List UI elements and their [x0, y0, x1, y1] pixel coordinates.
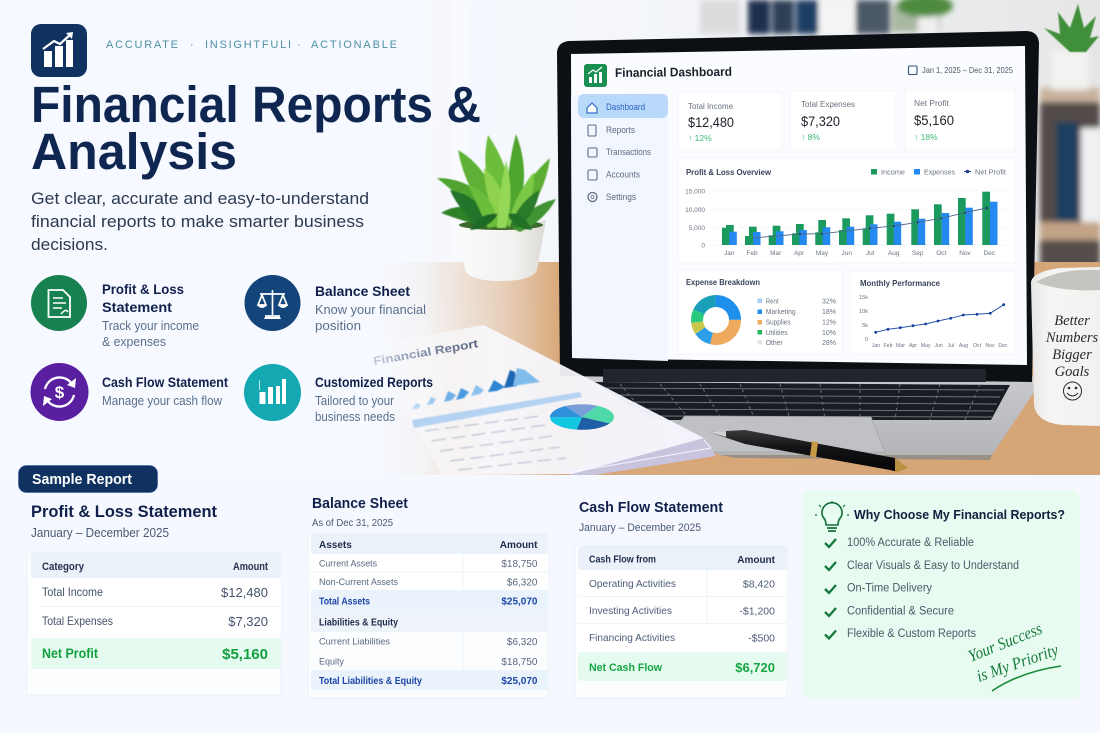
plant: [437, 134, 556, 281]
net profit line: [752, 207, 988, 238]
mug slogan: Better: [1054, 313, 1090, 329]
feature: profit and loss statement: Track your income: [102, 319, 199, 333]
month labels: Dec: [984, 250, 996, 257]
panel: profit and loss table: Total Expenses: [42, 614, 113, 628]
icon: bars: [244, 364, 301, 421]
panel: profit and loss table: [27, 503, 281, 695]
KPI card: total income: $12,480: [688, 115, 734, 130]
donut legend: Utilities: [766, 330, 788, 337]
laptop bezel: [557, 31, 1039, 382]
check list: Confidential & Secure: [847, 606, 954, 618]
dashboard screen: [571, 46, 1027, 365]
panel: monthly performance: Nov: [985, 343, 995, 349]
mug: [1031, 267, 1100, 426]
icon: scales: [244, 275, 300, 331]
liability rows: Current Liabilities: [319, 636, 390, 648]
chart legend: Expenses: [924, 168, 955, 176]
sidebar: Settings: [606, 192, 636, 202]
trackpad: [672, 416, 885, 452]
month labels: Mar: [770, 250, 782, 257]
feature: balance sheet: Balance Sheet: [315, 284, 411, 299]
background photo: wooden desk: [380, 262, 1100, 475]
tagline: ·: [190, 39, 194, 51]
panel: expense breakdown: Expense Breakdown: [686, 277, 760, 287]
feature: customized reports: business needs: [315, 410, 395, 424]
panel: balance sheet table: As of Dec 31, 2025: [312, 517, 393, 529]
feature: profit and loss statement: [31, 275, 199, 349]
panel: profit and loss table: Profit & Loss Statement: [31, 503, 217, 521]
line chart: [874, 303, 1005, 334]
month labels: May: [816, 250, 829, 257]
feature: balance sheet: position: [315, 319, 361, 333]
check list: Clear Visuals & Easy to Understand: [847, 560, 1019, 572]
net cash flow row: [578, 652, 787, 681]
panel: balance sheet table: $6,320: [507, 637, 538, 648]
table rows: Operating Activities: [589, 578, 676, 590]
panel: monthly performance: 0: [865, 337, 868, 343]
donut legend: Supplies: [766, 320, 791, 326]
tagline: ·: [297, 39, 301, 51]
chart legend: Net Profit: [975, 168, 1007, 176]
check list: On-Time Delivery: [847, 582, 932, 594]
sample report badge: [18, 466, 158, 492]
panel: monthly performance: Apr: [909, 343, 917, 349]
panel: balance sheet table: Non-Current Assets: [319, 577, 398, 588]
panel: monthly performance: Jul: [948, 343, 954, 349]
KPI card: total income: [678, 92, 782, 150]
asset rows: Current Assets: [319, 558, 377, 570]
dashboard header: Financial Dashboard: [615, 65, 732, 80]
main title: Financial Reports &: [31, 76, 481, 133]
feature: profit and loss statement: Statement: [102, 300, 173, 315]
tagline: [106, 39, 397, 51]
chart axis labels: [685, 188, 705, 250]
intro paragraph: financial reports to make smarter business: [31, 213, 364, 231]
feature: balance sheet: [244, 275, 426, 333]
month labels: Feb: [746, 250, 758, 257]
panel: profit and loss table: $5,160: [222, 646, 268, 663]
liabilities header: [311, 610, 548, 632]
month labels: Sep: [912, 250, 924, 257]
panel: balance sheet table: $18,750: [501, 559, 538, 570]
intro paragraph: Get clear, accurate and easy-to-understand: [31, 190, 369, 208]
pen: [709, 430, 908, 473]
panel: monthly performance: Jan: [872, 343, 880, 349]
donut legend: [758, 298, 836, 347]
net profit row: [31, 638, 281, 669]
sidebar: [571, 93, 668, 361]
month labels: [724, 250, 996, 257]
chart panel: profit and loss overview: [678, 158, 1015, 263]
panel: balance sheet table: Total Liabilities & Equity: [319, 676, 422, 687]
dashboard header: Jan 1, 2025 – Dec 31, 2025: [922, 65, 1013, 75]
KPI card: total expenses: $7,320: [801, 114, 840, 129]
panel: profit and loss table: $7,320: [228, 614, 268, 629]
panel: why choose my financial reports: Why Choose My Financial Reports?: [854, 507, 1065, 522]
panel: balance sheet table: Total Assets: [319, 596, 370, 608]
chart legend: [871, 168, 1007, 176]
laptop deck: [575, 376, 1034, 455]
panel: cash flow table: January – December 2025: [579, 522, 701, 534]
donut legend: 18%: [822, 309, 836, 316]
income bars: [722, 192, 990, 245]
feature: customized reports: Customized Reports: [315, 375, 433, 390]
month labels: Oct: [936, 250, 947, 257]
feature: cash flow statement: [30, 363, 228, 421]
feature: cash flow statement: Cash Flow Statement: [102, 375, 228, 390]
panel: monthly performance: 10k: [859, 309, 868, 315]
sample report badge: Sample Report: [32, 471, 132, 488]
check list: Flexible & Custom Reports: [847, 628, 976, 640]
panel: profit and loss table: Category: [42, 561, 85, 573]
panel: cash flow table: [575, 500, 787, 698]
donut legend: Rent: [766, 298, 779, 306]
panel: balance sheet table: $18,750: [501, 657, 538, 668]
table rows: Total Income: [42, 585, 103, 599]
icon: light bulb: [815, 501, 849, 531]
mug slogan: Numbers: [1045, 330, 1099, 346]
feature: cash flow statement: Manage your cash flow: [102, 394, 223, 408]
sidebar: Dashboard: [606, 102, 645, 112]
table header: [311, 534, 548, 554]
panel: cash flow table: -$1,200: [739, 606, 775, 618]
handwritten note: Your Success: [965, 619, 1045, 666]
paper stack: [565, 438, 716, 478]
check list: 100% Accurate & Reliable: [847, 537, 974, 549]
paper band: [412, 392, 582, 428]
chart axis labels: 10,000: [685, 207, 705, 214]
donut legend: 32%: [822, 298, 836, 306]
expense bars: [729, 202, 998, 245]
panel: cash flow table: Net Cash Flow: [589, 662, 662, 674]
panel: monthly performance: [850, 271, 1016, 354]
donut legend: Other: [766, 340, 783, 347]
handwritten note: is My Priority: [974, 640, 1061, 686]
total assets: [311, 590, 548, 610]
month labels: Nov: [959, 250, 972, 257]
donut legend: 28%: [822, 340, 836, 347]
bottom section background: [0, 475, 1100, 733]
panel: balance sheet table: $25,070: [501, 596, 538, 608]
month labels: Apr: [794, 250, 805, 257]
feature: profit and loss statement: Profit & Loss: [102, 282, 184, 297]
KPI card: total expenses: Total Expenses: [801, 100, 855, 109]
active item: [578, 94, 668, 118]
panel: balance sheet table: Assets: [319, 540, 352, 551]
KPI card: total income: Total Income: [688, 102, 734, 111]
panel: profit and loss table: January – December 2025: [31, 526, 169, 540]
panel: monthly performance: Dec: [998, 343, 1008, 349]
mug slogan: [1045, 313, 1099, 380]
panel: cash flow table: Cash Flow from: [589, 554, 656, 566]
intro paragraph: decisions.: [31, 236, 108, 254]
mug slogan: Goals: [1055, 364, 1090, 380]
panel: balance sheet table: Amount: [500, 540, 538, 551]
panel: monthly performance: Oct: [973, 343, 982, 349]
panel: cash flow table: $8,420: [743, 578, 775, 590]
sidebar: Accounts: [606, 170, 640, 180]
mug slogan: Bigger: [1052, 347, 1092, 363]
panel: cash flow table: Investing Activities: [589, 605, 672, 617]
chart panel: profit and loss overview: Profit & Loss Overview: [686, 167, 771, 177]
icon: document: [31, 275, 87, 331]
table header: [31, 553, 281, 578]
paper bar chart: [412, 368, 540, 409]
panel: monthly performance: 5k: [862, 323, 868, 329]
feature: balance sheet: Know your financial: [315, 303, 426, 317]
background photo: wall and shelves: [400, 0, 1100, 300]
pot: [457, 220, 546, 281]
panel: balance sheet table: $25,070: [501, 676, 538, 687]
main title: [31, 76, 481, 180]
panel: why choose my financial reports: [803, 490, 1080, 699]
month labels: Jun: [841, 250, 852, 257]
dashboard header: [584, 64, 1013, 87]
sidebar: Transactions: [606, 147, 651, 157]
paper pie chart: [566, 411, 598, 423]
panel: balance sheet table: Balance Sheet: [312, 496, 408, 512]
panel: monthly performance: Mar: [896, 343, 905, 349]
month labels: Jan: [724, 250, 735, 257]
panel: cash flow table: $6,720: [735, 660, 775, 675]
panel: cash flow table: Financing Activities: [589, 632, 675, 644]
intro paragraph: [31, 190, 369, 254]
paper sheet: [372, 325, 704, 475]
panel: balance sheet table: $6,320: [507, 578, 538, 588]
panel: balance sheet table: Equity: [319, 656, 344, 668]
table header: [578, 546, 787, 570]
chart axis labels: 5,000: [689, 225, 705, 232]
KPI card: total expenses: [790, 91, 896, 150]
chart axis labels: 15,000: [685, 188, 705, 196]
smiley: [1064, 382, 1082, 400]
tagline: ACTIONABLE: [311, 39, 397, 51]
total liabilities: [311, 670, 548, 690]
panel: cash flow table: Amount: [737, 555, 776, 566]
panel: balance sheet table: Liabilities & Equity: [319, 618, 398, 628]
KPI card: net profit: Net Profit: [914, 99, 950, 108]
feature: profit and loss statement: & expenses: [102, 335, 166, 349]
panel: cash flow table: Cash Flow Statement: [579, 500, 723, 516]
panel: profit and loss table: Amount: [233, 561, 268, 573]
paper title: Financial Report: [372, 338, 479, 368]
panel: profit and loss table: Net Profit: [42, 646, 98, 661]
panel: expense breakdown: [678, 270, 843, 354]
panel: balance sheet table: [308, 496, 548, 698]
panel: monthly performance: 15k: [859, 295, 868, 301]
leaves: [437, 134, 556, 232]
logo badge: [31, 24, 87, 77]
panel: monthly performance: Jun: [934, 343, 943, 349]
KPI card: total expenses: ↑ 8%: [801, 132, 820, 142]
laptop: [557, 31, 1039, 460]
icon: dollar cycle: [30, 363, 88, 421]
tagline: INSIGHTFULI: [205, 39, 291, 51]
panel: monthly performance: Feb: [884, 343, 893, 349]
KPI card: net profit: ↑ 18%: [914, 132, 938, 142]
feature: customized reports: Tailored to your: [315, 394, 394, 408]
panel: monthly performance: Aug: [959, 343, 968, 349]
feature: customized reports: [244, 364, 433, 424]
month labels: Aug: [888, 250, 900, 257]
check list: [825, 537, 1019, 640]
keyboard: [594, 382, 1010, 420]
KPI card: net profit: [905, 90, 1015, 150]
panel: monthly performance: May: [921, 343, 931, 349]
panel: monthly performance: Monthly Performance: [860, 278, 940, 288]
panel: profit and loss table: $12,480: [221, 585, 268, 600]
chart axis labels: 0: [701, 242, 705, 250]
handwritten note: [965, 619, 1061, 691]
paper table lines: [425, 416, 566, 470]
month labels: Jul: [866, 250, 875, 257]
icon: dollar cycle: $: [55, 383, 65, 402]
sidebar: Reports: [606, 125, 635, 135]
financial report paper: [372, 325, 716, 478]
donut legend: 12%: [822, 320, 836, 326]
donut legend: 10%: [822, 330, 836, 337]
panel: cash flow table: -$500: [748, 632, 775, 644]
KPI card: net profit: $5,160: [914, 113, 954, 128]
tagline: ACCURATE: [106, 39, 178, 51]
chart legend: Income: [881, 168, 905, 176]
main title: Analysis: [31, 123, 237, 180]
KPI card: total income: ↑ 12%: [688, 133, 712, 143]
donut legend: Marketing: [766, 309, 796, 316]
donut chart: [697, 301, 735, 339]
